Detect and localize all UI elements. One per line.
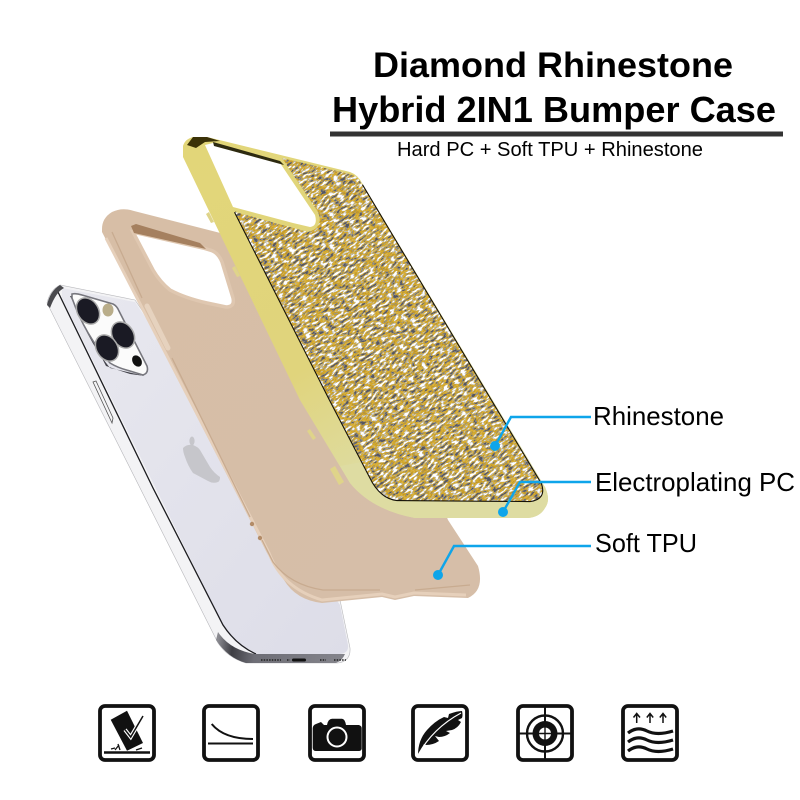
apple body [183,445,220,483]
lens top [72,294,104,328]
icon: flexible curve [204,706,258,760]
hole bottom [258,536,262,540]
title rule [330,132,783,136]
bottom corner and port strip [216,632,345,663]
icon: breathable waves [623,706,677,760]
title line two: Hybrid 2IN1 Bumper Case [332,89,776,130]
TPU outer rim highlight [106,238,466,600]
TPU side groove [112,232,470,590]
label: Soft TPU [595,528,697,558]
gold rhinestone case [183,137,548,518]
phone edge line [58,292,256,654]
feature icons [100,706,677,760]
frame shadow top [187,137,220,148]
TPU inner window wall [131,224,206,249]
frame inner dark edge [235,185,542,501]
dot [490,441,500,451]
TPU button bump [147,306,168,348]
icon: target [518,706,572,760]
callout: rhinestone [490,401,724,451]
dot [433,570,443,580]
lens right [107,318,139,352]
TPU button holes [250,522,262,540]
side button [93,381,113,423]
module plate [72,294,148,375]
leader line [438,546,591,575]
TPU body [102,209,480,603]
phone back panel [62,288,348,654]
icon: camera [310,706,364,760]
icon: apple logo [183,436,220,483]
frame bottom light edge [340,462,548,518]
window top shadow [213,142,284,165]
callout: electroplating PC [498,467,795,517]
phone side frame [47,285,350,663]
speaker holes [261,659,346,661]
lens bottom [91,331,123,365]
flash [102,304,114,316]
soft TPU case [102,209,480,603]
dot [498,507,508,517]
title [330,46,783,161]
rhinestone glitter panel [235,158,542,501]
leader line [503,482,591,512]
title line one: Diamond Rhinestone [373,46,733,85]
TPU window rim [133,232,233,307]
frame side tabs [206,212,344,485]
lidar [130,354,144,368]
icon: feather [413,706,467,760]
apple leaf [189,436,195,446]
subtitle: Hard PC + Soft TPU + Rhinestone [397,139,703,161]
gold frame [183,137,548,518]
module shadow [70,296,145,376]
callout: soft TPU [433,528,697,580]
top corner shading [47,285,64,308]
icon: drop protection [100,706,154,760]
label: Rhinestone [593,401,724,431]
leader line [495,417,591,446]
phone [47,285,350,663]
hole top [250,522,254,526]
label: Electroplating PC [595,467,795,497]
camera module [70,294,148,376]
charging port [292,658,306,662]
